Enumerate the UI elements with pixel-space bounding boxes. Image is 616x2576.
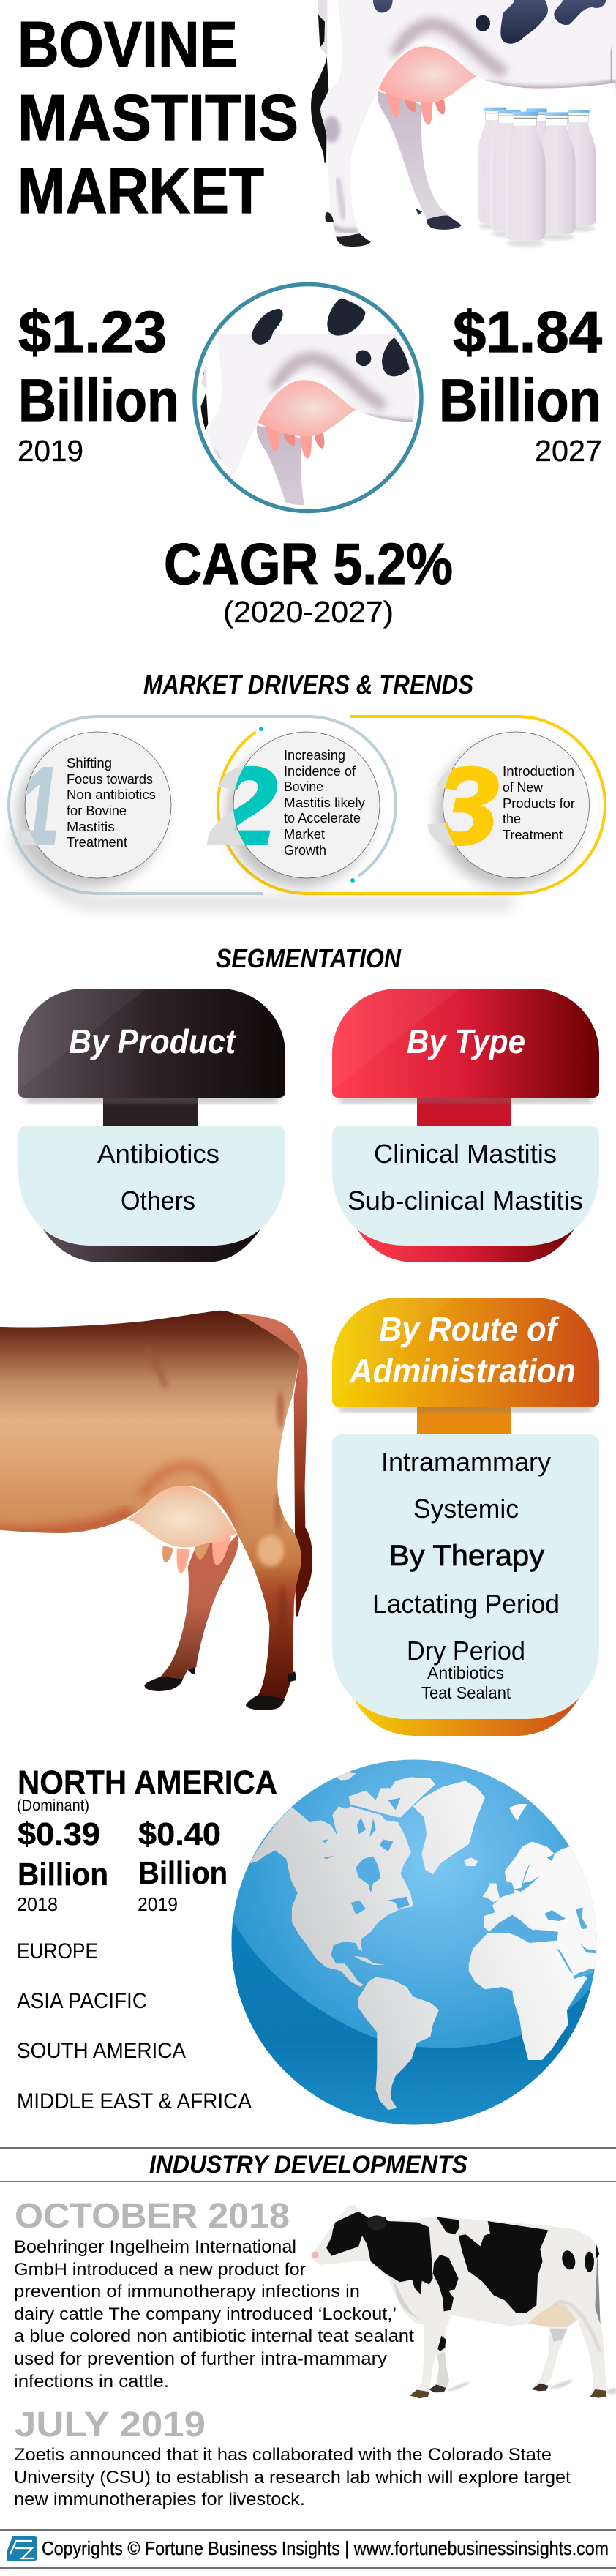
regional values: EUROPE <box>17 1939 98 1963</box>
stat: 2019 market value: 2019 <box>18 434 83 468</box>
driver 2: Increasing <box>284 748 345 763</box>
driver 3: the <box>503 812 521 826</box>
driver 1: Treatment <box>67 835 127 850</box>
panel: by route of administration: Teat Sealant <box>421 1683 511 1702</box>
development: October 2018: GmbH introduced a new product for <box>14 2260 306 2280</box>
development: October 2018: infections in cattle. <box>14 2372 169 2392</box>
panel: by route of administration: By Route of <box>379 1310 560 1348</box>
panel: by type <box>332 989 599 1262</box>
driver 2: Growth <box>284 843 326 858</box>
panel: by type: Sub-clinical Mastitis <box>348 1186 583 1216</box>
development: October 2018: Boehringer Ingelheim International <box>14 2237 296 2257</box>
panel: by route of administration: Administration <box>349 1352 576 1390</box>
development: October 2018: a blue colored non antibiotic internal teat sealant <box>14 2326 414 2346</box>
development: July 2019 <box>14 2405 571 2509</box>
title: MASTITIS <box>18 81 298 154</box>
driver 2: to Accelerate <box>284 811 361 825</box>
panel: by route of administration <box>332 1298 599 1736</box>
illustration: brown cow hindquarters <box>0 1311 312 1710</box>
driver 1: Focus towards <box>67 772 153 787</box>
driver 3: Treatment <box>503 828 563 842</box>
panel: by product: Antibiotics <box>97 1139 219 1169</box>
regional values: $0.40 <box>138 1816 221 1852</box>
driver 2: Incidence of <box>284 764 356 779</box>
driver 1: Shifting <box>67 756 112 771</box>
icon: globe <box>227 1756 614 2130</box>
driver 1: for Bovine <box>67 804 127 818</box>
panel: by route of administration: By Therapy <box>389 1540 544 1572</box>
regional values: ASIA PACIFIC <box>17 1989 147 2013</box>
panel: by type: By Type <box>407 1022 525 1060</box>
development: October 2018: dairy cattle The company introduced ‘Lockout,’ <box>14 2304 397 2324</box>
development: July 2019: new immunotherapies for livestock. <box>14 2490 305 2509</box>
driver 1: 1 <box>20 744 59 867</box>
stat: 2019 market value: $1.23 <box>18 299 167 364</box>
driver 1: Non antibiotics <box>67 787 156 802</box>
stat: 2027 market value <box>439 299 603 468</box>
driver 2 <box>208 732 380 887</box>
driver 2: 2 <box>208 744 277 867</box>
driver 2: Market <box>284 827 325 842</box>
outline: yellow capsule <box>218 716 605 894</box>
regional values: Billion <box>138 1855 228 1891</box>
title: MARKET <box>18 154 264 227</box>
stat: 2019 market value: Billion <box>18 367 179 434</box>
illustration: holstein cow <box>311 2205 616 2398</box>
inland and coastal seas <box>321 1798 409 1915</box>
outline: gray capsule <box>9 716 396 894</box>
panel: by type: Clinical Mastitis <box>374 1139 557 1169</box>
regional values: 2018 <box>17 1893 58 1915</box>
driver 1: 1 <box>20 744 59 867</box>
development: October 2018: used for prevention of further intra-mammary <box>14 2349 387 2369</box>
regional values: SOUTH AMERICA <box>17 2039 186 2063</box>
driver 3: 3 <box>428 744 499 867</box>
driver 3 <box>428 732 590 887</box>
stat: 2027 market value: $1.84 <box>453 299 603 364</box>
regional values: 2019 <box>138 1893 178 1915</box>
driver 3: Products for <box>503 796 575 811</box>
divider lines <box>0 2148 616 2568</box>
regional values: Billion <box>18 1857 108 1892</box>
heading: segmentation: SEGMENTATION <box>216 943 402 973</box>
icon: circular udder illustration <box>192 282 424 514</box>
panel: by route of administration: Antibiotics <box>427 1663 504 1682</box>
driver 3: Introduction <box>503 764 574 779</box>
regional values: (Dominant) <box>17 1797 89 1814</box>
development: July 2019: University (CSU) to establish a research lab which will explore target <box>14 2468 571 2487</box>
driver 3: 3 <box>428 744 499 867</box>
panel: by route of administration: Intramammary <box>381 1447 551 1477</box>
panel: market drivers timeline <box>9 716 605 903</box>
panel: by product <box>18 989 285 1262</box>
panel: by route of administration: Systemic <box>413 1494 519 1524</box>
panel: by route of administration: Lactating Period <box>372 1589 560 1619</box>
development: July 2019: Zoetis announced that it has collaborated with the Colorado State <box>14 2445 552 2465</box>
icon: Fortune Business Insights logo <box>7 2536 37 2561</box>
driver 2: Mastitis likely <box>284 795 365 810</box>
panel: by route of administration: Dry Period <box>407 1636 525 1666</box>
panel: by product: Others <box>121 1186 195 1216</box>
regional values <box>17 1764 277 2113</box>
regional values: $0.39 <box>18 1816 100 1852</box>
title: BOVINE <box>18 8 238 80</box>
title <box>18 8 298 227</box>
stat: CAGR: CAGR 5.2% <box>164 531 453 596</box>
driver 1: Mastitis <box>67 820 115 834</box>
development: October 2018: OCTOBER 2018 <box>15 2197 290 2236</box>
stat: CAGR: (2020-2027) <box>223 595 394 629</box>
illustration: cow udder and milk bottles <box>311 0 616 247</box>
driver 3: of New <box>503 780 544 795</box>
driver 1 <box>18 732 171 887</box>
regional values: MIDDLE EAST & AFRICA <box>17 2089 252 2113</box>
heading: industry developments: INDUSTRY DEVELOPMENTS <box>149 2151 467 2179</box>
heading: market drivers and trends: MARKET DRIVERS & TRENDS <box>143 670 473 700</box>
development: October 2018 <box>14 2197 414 2392</box>
regional values: NORTH AMERICA <box>18 1764 277 1801</box>
panel: by product: By Product <box>69 1022 237 1060</box>
development: October 2018: prevention of immunotherapy infections in <box>14 2282 360 2302</box>
driver 2: Bovine <box>284 779 323 794</box>
stat: 2019 market value <box>18 299 179 468</box>
stat: CAGR <box>164 531 453 629</box>
stat: 2027 market value: 2027 <box>535 434 602 468</box>
driver 2: 2 <box>208 744 277 867</box>
development: July 2019: JULY 2019 <box>15 2405 206 2444</box>
